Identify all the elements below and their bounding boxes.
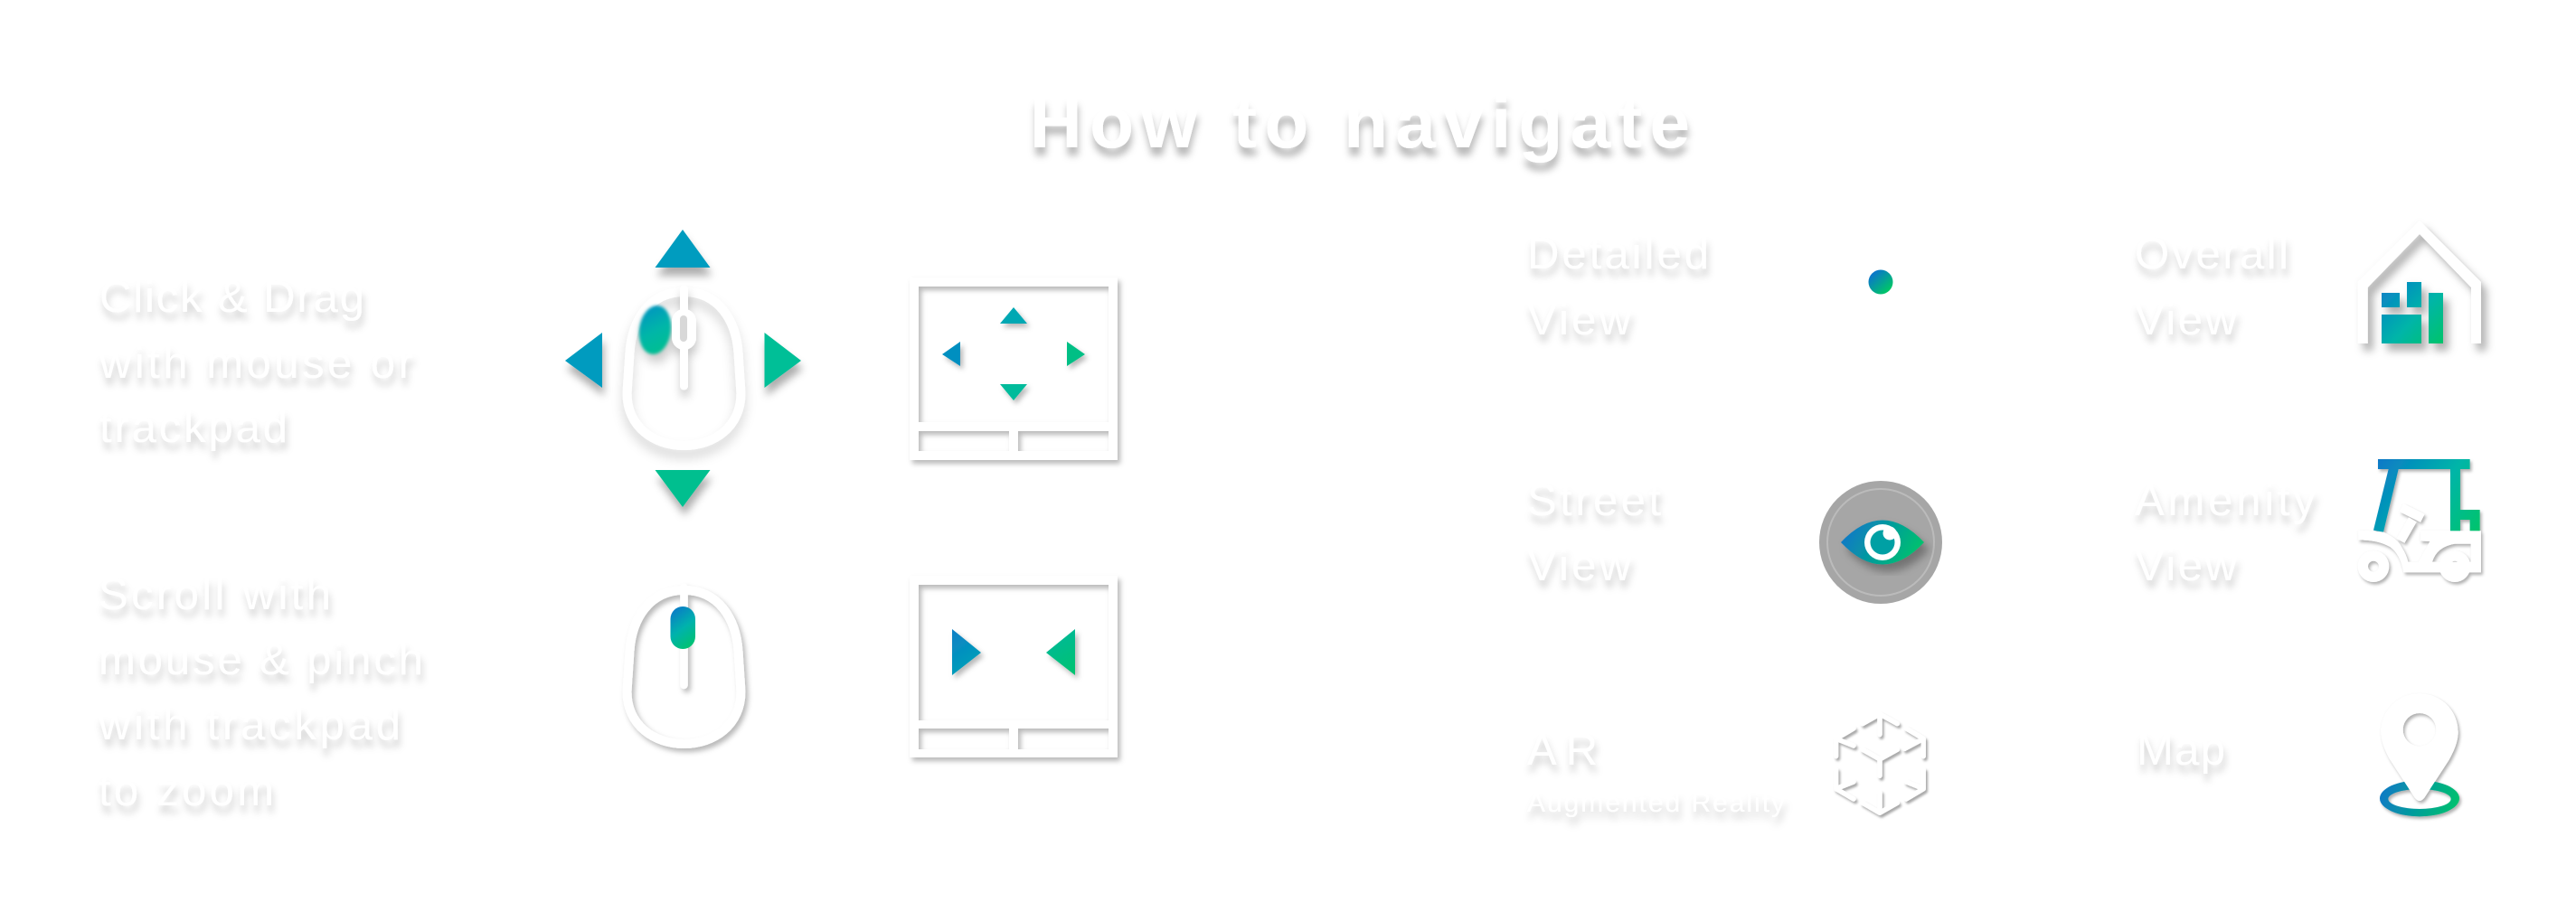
icon: street view eye <box>1819 481 1942 604</box>
label: augmented reality <box>1527 726 1785 818</box>
icon: amenity view golf cart <box>2358 459 2481 582</box>
label: amenity view <box>2135 476 2317 590</box>
label: street view: Street <box>1527 476 1661 525</box>
icon: mouse with click finger <box>627 289 741 446</box>
label: overall view <box>2135 230 2288 344</box>
text block: scroll to zoom: mouse & pinch <box>99 635 423 684</box>
icon: drag arrows <box>565 230 801 507</box>
text block: scroll to zoom: to zoom <box>99 766 274 815</box>
label: augmented reality: A R <box>1527 726 1598 775</box>
label: street view: View <box>1527 541 1632 590</box>
label: overall view: Overall <box>2135 230 2288 278</box>
icon: trackpad with drag arrows <box>910 277 1118 460</box>
text block: click and drag: trackpad <box>99 403 288 452</box>
label: detailed view: View <box>1527 296 1632 344</box>
label: detailed view: Detailed <box>1527 230 1709 278</box>
text block: scroll to zoom: Scroll with <box>99 570 331 619</box>
title: How to navigate <box>1030 82 1690 163</box>
icon: augmented reality cube <box>1836 714 1923 813</box>
label: map: Map <box>2137 726 2225 775</box>
label: detailed view <box>1527 230 1709 344</box>
text block: click and drag: with mouse or <box>99 339 413 388</box>
label: amenity view: View <box>2135 541 2238 590</box>
label: overall view: View <box>2135 296 2238 344</box>
icon: detailed view dot <box>1868 269 1893 295</box>
label: augmented reality: Augmented Reality <box>1527 788 1785 818</box>
text block: click and drag: Click & Drag <box>99 273 364 322</box>
icon: trackpad with pinch arrows <box>910 576 1118 757</box>
label: amenity view: Amenity <box>2135 476 2317 525</box>
icon: map pin <box>2380 693 2459 816</box>
text block: scroll to zoom <box>98 570 423 815</box>
label: street view <box>1527 476 1661 590</box>
icon: mouse with scroll wheel <box>627 588 741 744</box>
text block: scroll to zoom: with trackpad <box>98 700 401 749</box>
text block: click and drag <box>99 273 413 452</box>
icon: overall view house <box>2358 221 2481 343</box>
